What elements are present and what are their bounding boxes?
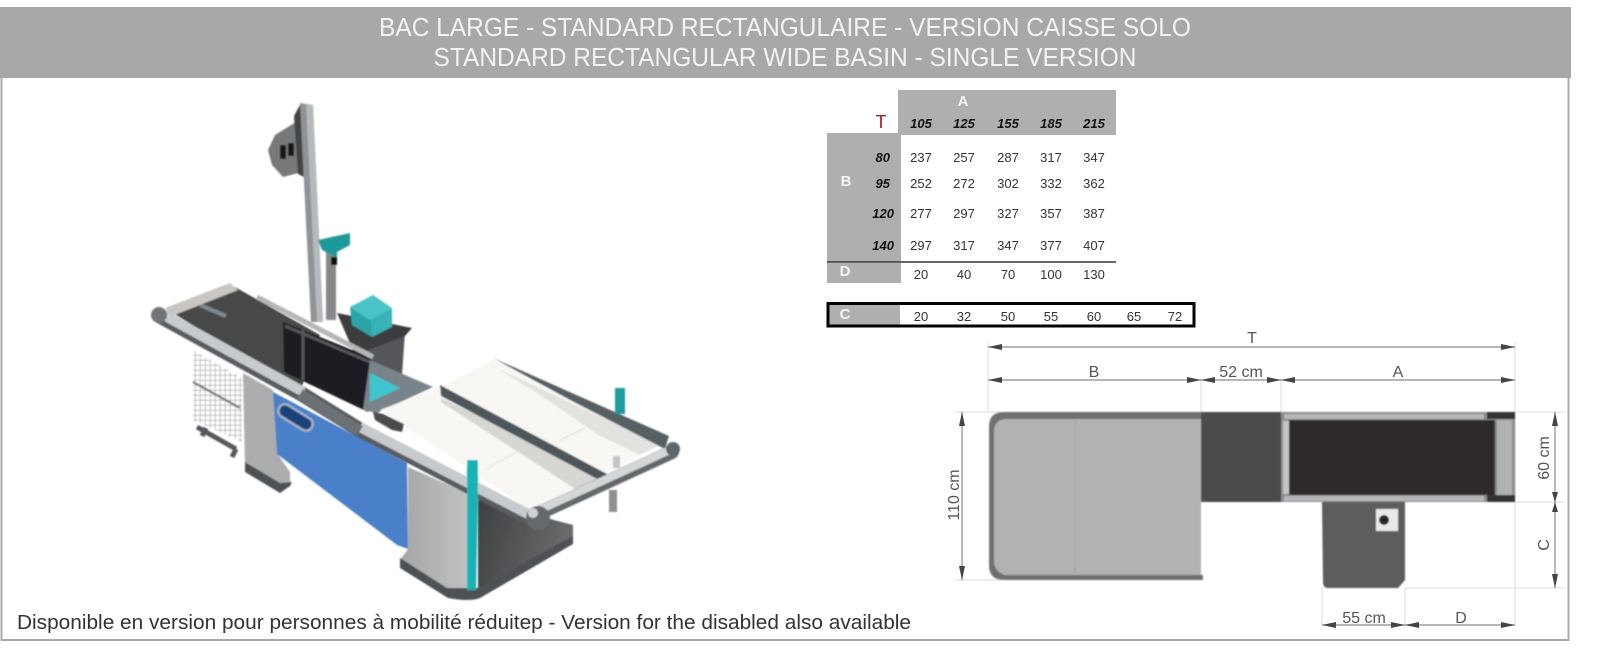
- row D: D: [840, 263, 851, 280]
- dimension table: [827, 90, 1194, 326]
- label T: T: [876, 112, 886, 132]
- table values: [910, 150, 1105, 253]
- row header B: 80: [876, 150, 891, 165]
- table header A: 155: [997, 116, 1020, 131]
- illustration: checkout counter: [151, 103, 680, 600]
- plan view diagram: [946, 330, 1565, 628]
- table values: 407: [1083, 238, 1105, 253]
- row header B: 140: [872, 238, 895, 253]
- row D: 100: [1040, 267, 1062, 282]
- title banner: BAC LARGE - STANDARD RECTANGULAIRE - VERSION CAISSE SOLO: [379, 14, 1191, 42]
- left basin: [989, 412, 1203, 580]
- table values: 297: [953, 206, 975, 221]
- grey tray with cyan inset: [363, 360, 433, 413]
- row C: 55: [1044, 309, 1058, 324]
- table values: 287: [997, 150, 1019, 165]
- caption: Disponible en version pour personnes à mobilité réduitep - Version for the disabled also available: [17, 612, 911, 634]
- table values: 357: [1040, 206, 1062, 221]
- conveyor: [1281, 412, 1515, 502]
- bagging outlet: [1322, 502, 1405, 588]
- table header A: A: [958, 93, 969, 110]
- table values: 272: [953, 176, 975, 191]
- dark end cabinet: [478, 500, 573, 594]
- teal box: [350, 295, 392, 337]
- dimension labels: [946, 330, 1553, 627]
- row C: 32: [957, 309, 971, 324]
- table values: 377: [1040, 238, 1062, 253]
- table values: 362: [1083, 176, 1105, 191]
- teal scanner on post: [318, 233, 350, 320]
- title banner: STANDARD RECTANGULAR WIDE BASIN - SINGLE VERSION: [434, 44, 1136, 72]
- left grey pillar: [243, 373, 292, 493]
- table header A: 105: [910, 116, 933, 131]
- dimension labels: 55 cm: [1342, 610, 1386, 627]
- row C: 20: [914, 309, 928, 324]
- dimension arrows: [959, 344, 1558, 628]
- front rail: [526, 442, 680, 530]
- black bagging opening: [257, 297, 373, 412]
- dimension labels: B: [1089, 364, 1099, 381]
- table values: 347: [1083, 150, 1105, 165]
- table values: 387: [1083, 206, 1105, 221]
- teal strip: [467, 460, 478, 590]
- table values: 297: [910, 238, 932, 253]
- dimension labels: A: [1393, 364, 1404, 381]
- row D: [827, 262, 1116, 283]
- table values: 347: [997, 238, 1019, 253]
- row C: [828, 304, 1194, 326]
- row C: C: [840, 306, 851, 323]
- table values: 257: [953, 150, 975, 165]
- row D: 130: [1083, 267, 1105, 282]
- row header B: B: [841, 173, 852, 190]
- table values: 317: [1040, 150, 1062, 165]
- title banner: [0, 7, 1571, 78]
- table header A: 185: [1040, 116, 1063, 131]
- base plinth: [400, 536, 573, 600]
- row C: 65: [1127, 309, 1141, 324]
- teal flags and post: [609, 388, 625, 512]
- extension lines: [955, 342, 1565, 625]
- row D: 20: [914, 267, 928, 282]
- table values: 317: [953, 238, 975, 253]
- row header B: 95: [876, 176, 891, 191]
- row C: 60: [1087, 309, 1101, 324]
- table values: 327: [997, 206, 1019, 221]
- row header B: [827, 133, 901, 262]
- table values: 277: [910, 206, 932, 221]
- row header B: 120: [872, 206, 895, 221]
- in-feed conveyor belt: [165, 283, 320, 392]
- dimension labels: C: [1536, 539, 1553, 551]
- dimension labels: 60 cm: [1536, 436, 1553, 480]
- right grey pillar: [400, 467, 467, 590]
- display pole with sign: [268, 103, 323, 322]
- middle scanner block: [1201, 412, 1281, 502]
- cabinet and shelf: [337, 313, 412, 375]
- table values: 332: [1040, 176, 1062, 191]
- table values: 237: [910, 150, 932, 165]
- row C: 50: [1001, 309, 1015, 324]
- row D: 40: [957, 267, 971, 282]
- row D: 70: [1001, 267, 1015, 282]
- table header A: 215: [1082, 116, 1106, 131]
- table header A: [898, 90, 1116, 135]
- table values: 302: [997, 176, 1019, 191]
- row C: 72: [1168, 309, 1182, 324]
- main rail: [151, 307, 530, 518]
- dimension labels: 110 cm: [946, 469, 963, 521]
- table header A: 125: [953, 116, 976, 131]
- icon: wire basket: [193, 350, 242, 457]
- blue panel: [273, 392, 408, 549]
- dimension labels: 52 cm: [1219, 364, 1263, 381]
- white bagging surface: [373, 360, 670, 510]
- dimension labels: D: [1455, 610, 1467, 627]
- table values: 252: [910, 176, 932, 191]
- dimension labels: T: [1247, 330, 1257, 347]
- dividers: [440, 358, 669, 481]
